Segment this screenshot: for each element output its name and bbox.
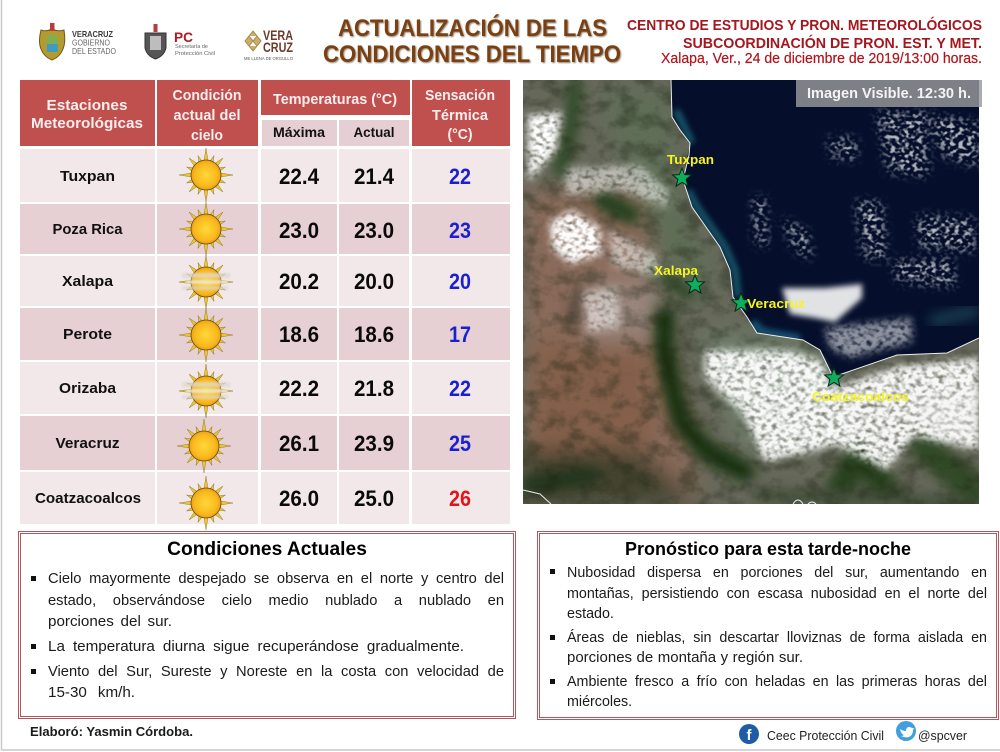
row: Poza Rica: 23 (449, 218, 471, 243)
issuing office and date: SUBCOORDINACIÓN DE PRON. EST. Y MET. (683, 34, 982, 52)
table header: cielo (191, 127, 223, 144)
image time label: Imagen Visible. 12:30 h. (807, 85, 971, 102)
table header: Temperaturas (°C) (273, 91, 397, 108)
bullet list: forecast: estado. (567, 606, 614, 622)
bullet list: current conditions: estado, observándose cielo medio nublado a nublado en (48, 593, 504, 609)
logo: Gobierno del Estado de Veracruz: GOBIERNO (72, 38, 110, 48)
table header: Actual (354, 125, 394, 140)
panel: current conditions (20, 533, 514, 717)
bullet list: current conditions: Viento del Sur, Sureste y Noreste en la costa con velocidad de (48, 664, 504, 680)
row: Orizaba: 21.8 (354, 376, 394, 401)
issuing office and date (627, 16, 982, 67)
logo: Gobierno del Estado de Veracruz: VERACRUZ (72, 29, 113, 39)
row backgrounds (20, 149, 510, 524)
bullet list: current conditions: Cielo mayormente despejado se observa en el norte y centro del (48, 571, 504, 587)
bullet list: current conditions (31, 571, 504, 701)
bullet list: forecast: montañas, persistiendo con escasa nubosidad en el norte del (567, 586, 987, 602)
sea (672, 80, 979, 374)
logo: Veracruz me llena de orgullo: ME LLENA DE ORGULLO (244, 56, 293, 61)
row: Tuxpan (60, 148, 471, 202)
row: Xalapa: 20 (449, 269, 471, 294)
table header: (°C) (448, 126, 472, 143)
issuing office and date: Xalapa, Ver., 24 de diciembre de 2019/13:00 horas. (661, 50, 982, 67)
author credit: Elaboró: Yasmin Córdoba. (30, 724, 193, 739)
logo: Gobierno del Estado de Veracruz (40, 23, 116, 60)
row: Poza Rica: 23.0 (279, 218, 319, 243)
coastline (671, 80, 979, 377)
twitter account: @spcver (918, 728, 968, 743)
logo: Veracruz me llena de orgullo: VERA (263, 27, 293, 43)
row: Orizaba: 22 (449, 376, 471, 401)
bullet list: forecast: Ambiente fresco a frío con heladas en las primeras horas del (567, 674, 987, 690)
bullet list: forecast: Áreas de nieblas, sin descartar lloviznas de forma aislada en (567, 630, 987, 646)
bullet list: forecast: Nubosidad dispersa en porciones del sur, aumentando en (567, 565, 987, 581)
row: Tuxpan: Tuxpan (60, 168, 115, 185)
title: ACTUALIZACIÓN DE LAS (338, 14, 607, 42)
star and label: Tuxpan: Tuxpan (667, 152, 714, 167)
bullet list: forecast: miércoles. (567, 694, 632, 710)
row: Xalapa: 20.2 (279, 269, 319, 294)
issuing office and date: CENTRO DE ESTUDIOS Y PRON. METEOROLÓGICOS (627, 16, 982, 34)
table header: actual del (174, 107, 240, 124)
row: Perote: 18.6 (354, 322, 394, 347)
row: Veracruz: 23.9 (354, 431, 394, 456)
row: Tuxpan: 21.4 (354, 164, 395, 189)
row: Veracruz (56, 419, 471, 473)
logo: Veracruz me llena de orgullo (244, 27, 293, 61)
image time label (796, 80, 982, 107)
row: Perote: 18.6 (279, 322, 319, 347)
row: Coatzacoalcos: 26 (449, 486, 471, 511)
cloud fields (528, 112, 979, 470)
icon: facebook: f (746, 727, 752, 744)
row: Coatzacoalcos: 26.0 (279, 486, 319, 511)
logo: Gobierno del Estado de Veracruz: DEL ESTADO (72, 46, 116, 56)
bullet list: forecast: porciones de montaña y región sur. (567, 649, 803, 666)
star and label: Xalapa: Xalapa (654, 263, 699, 278)
star and label: Coatzacoalcos (812, 368, 909, 404)
star and label: Xalapa (654, 263, 704, 293)
row: Perote: 17 (449, 322, 471, 347)
logo: Veracruz me llena de orgullo: CRUZ (263, 39, 293, 55)
table header: Térmica (432, 107, 489, 124)
table header: Condición (172, 87, 242, 104)
row: Poza Rica: Poza Rica (52, 221, 123, 238)
bullet list: forecast (550, 565, 987, 710)
row: Xalapa: Xalapa (62, 273, 114, 290)
bullet list: current conditions: porciones del sur. (48, 613, 172, 630)
row: Veracruz: 25 (449, 431, 471, 456)
row: Poza Rica: 23.0 (354, 218, 394, 243)
heading: current conditions: Condiciones Actuales (167, 539, 367, 560)
weather table (20, 80, 510, 530)
bullet list: current conditions: La temperatura diurna sigue recuperándose gradualmente. (48, 638, 464, 655)
facebook account: Ceec Protección Civil (767, 728, 884, 743)
row: Tuxpan: 22 (449, 164, 471, 189)
icon: twitter (896, 721, 916, 741)
satellite map (523, 80, 979, 504)
row: Tuxpan: 22.4 (279, 164, 320, 189)
star and label: Veracruz: Veracruz (747, 296, 806, 311)
panel: forecast (539, 533, 997, 718)
row: Coatzacoalcos: Coatzacoalcos (35, 490, 141, 507)
bullet list: current conditions: 15-30 km/h. (48, 684, 135, 701)
heading: forecast: Pronóstico para esta tarde-noche (625, 539, 911, 559)
table header: Sensación (425, 87, 495, 104)
title (323, 14, 621, 68)
row: Orizaba: Orizaba (59, 380, 117, 397)
land (523, 80, 979, 504)
table header (20, 80, 510, 146)
row: Orizaba: 22.2 (279, 376, 319, 401)
row: Xalapa (62, 255, 471, 309)
icon: facebook (739, 724, 759, 744)
row: Orizaba (59, 364, 471, 418)
coastal turbidity (676, 110, 979, 339)
row: Perote (63, 308, 471, 362)
table header: Máxima (273, 125, 326, 140)
logo: Secretaría de Protección Civil: Secretaría de (175, 44, 208, 50)
row: Veracruz: Veracruz (56, 435, 120, 452)
table header: Estaciones (46, 97, 128, 114)
row: Veracruz: 26.1 (279, 431, 319, 456)
star and label: Tuxpan (667, 152, 714, 186)
star and label: Coatzacoalcos: Coatzacoalcos (812, 389, 909, 404)
logo: Secretaría de Protección Civil: Protección Civil (175, 51, 215, 57)
table header: Meteorológicas (31, 115, 143, 132)
logo: Secretaría de Protección Civil (145, 24, 215, 59)
row: Perote: Perote (63, 326, 112, 343)
logo: Secretaría de Protección Civil: PC (174, 29, 193, 45)
row: Poza Rica (52, 202, 471, 256)
title: CONDICIONES DEL TIEMPO (323, 41, 621, 68)
row: Coatzacoalcos: 25.0 (354, 486, 394, 511)
row: Xalapa: 20.0 (354, 269, 394, 294)
row: Coatzacoalcos (35, 476, 471, 530)
star and label: Veracruz (732, 293, 806, 311)
